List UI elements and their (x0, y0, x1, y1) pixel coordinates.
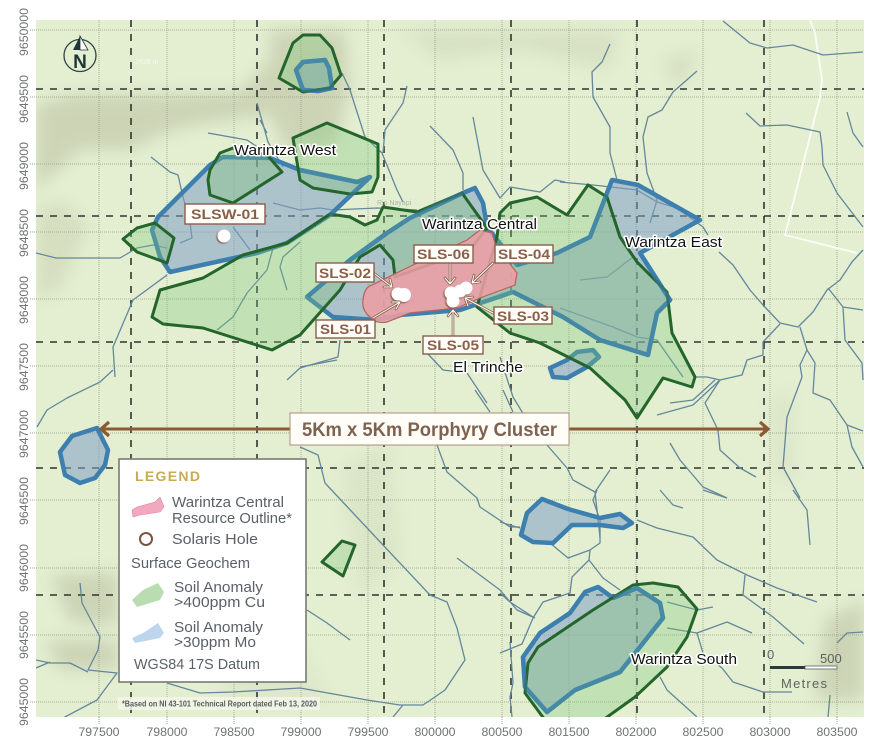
place labels: Warintza Central (422, 217, 537, 233)
leader SLS-02 (375, 274, 392, 287)
hole SLS-05 (446, 294, 460, 308)
northing axis labels: 9647500 (17, 343, 31, 391)
easting axis labels: 803000 (749, 725, 791, 739)
northing axis labels: 9645000 (17, 678, 31, 726)
anomaly: Warintza South Mo (523, 587, 663, 712)
hole SLS-04 (460, 282, 472, 294)
leader SLS-05 (448, 310, 458, 336)
anomaly: Warintza East Cu (477, 185, 695, 418)
legend: molybdenum anomaly: Soil Anomaly (174, 619, 264, 636)
leader arrows (373, 263, 493, 336)
label SLS-05: SLS-05 (427, 337, 479, 353)
northing axis labels: 9649000 (17, 142, 31, 190)
easting axis labels: 799500 (347, 725, 389, 739)
northing axis labels (17, 8, 31, 726)
place labels: Warintza East (625, 235, 722, 251)
legend: molybdenum anomaly (132, 619, 264, 651)
anomaly: big west-central Cu (152, 193, 487, 350)
northing axis labels: 9645500 (17, 611, 31, 659)
hole labels (185, 204, 553, 354)
cluster span arrow (101, 422, 768, 436)
anomaly: Warintza West Cu (208, 148, 282, 203)
anomaly: Warintza West Cu left (123, 223, 174, 263)
leader SLS-01 (373, 302, 400, 318)
scale bar: 500 (820, 651, 842, 666)
legend (119, 459, 306, 682)
scale bar: Metres (781, 676, 828, 691)
label SLS-03: SLS-03 (497, 308, 549, 324)
anomaly: north Mo (296, 60, 332, 91)
legend: Solaris hole (140, 531, 258, 548)
anomaly: north Cu (279, 35, 341, 92)
easting axis labels: 797500 (78, 725, 120, 739)
leader SLS-06 (445, 263, 455, 284)
Warintza Central resource outline (363, 230, 517, 323)
anomaly: small Cu (322, 541, 355, 576)
easting axis labels (78, 725, 858, 739)
legend: resource outline: Warintza Central (172, 494, 284, 511)
label SLSW-01 (185, 204, 265, 224)
molybdenum soil anomalies (60, 60, 700, 712)
label SLSW-01: SLSW-01 (191, 206, 259, 222)
legend: resource outline: Resource Outline* (172, 510, 292, 527)
blue outlines over copper (296, 60, 670, 712)
easting axis labels: 801500 (548, 725, 590, 739)
copper soil anomalies (123, 35, 697, 720)
north arrow (64, 36, 96, 73)
footnote: *Based on NI 43-101 Technical Report dated Feb 13, 2020 (122, 700, 317, 708)
anomaly: Warintza South Cu (525, 583, 697, 720)
cluster banner (290, 413, 569, 445)
place labels (234, 143, 737, 668)
label SLS-01: SLS-01 (320, 321, 371, 337)
legend: copper anomaly (132, 579, 265, 611)
easting axis labels: 798500 (213, 725, 255, 739)
northing axis labels: 9649500 (17, 75, 31, 123)
anomaly: upper Cu (293, 123, 378, 194)
easting axis labels: 802000 (615, 725, 657, 739)
label SLS-04: SLS-04 (498, 246, 550, 262)
easting axis labels: 800000 (414, 725, 456, 739)
hole SLS-03 (454, 284, 466, 298)
legend: copper anomaly: Soil Anomaly (174, 579, 264, 596)
legend: copper anomaly: >400ppm Cu (174, 594, 265, 611)
place labels: El Trinche (453, 360, 523, 376)
faint map annotations: 2426 m (135, 59, 159, 66)
cluster banner: 5Km x 5Km Porphyry Cluster (302, 420, 558, 441)
hole SLSW-01 (218, 230, 230, 242)
scale bar (767, 647, 842, 691)
label SLS-02: SLS-02 (319, 265, 371, 281)
legend: datum: WGS84 17S Datum (134, 656, 260, 673)
easting axis labels: 800500 (481, 725, 523, 739)
anomaly: Warintza West Mo (152, 157, 370, 272)
easting axis labels: 799000 (280, 725, 322, 739)
hole SLS-02 (392, 288, 404, 300)
faint map annotations: Rio Nayapi (377, 200, 412, 207)
faint map annotations (135, 59, 412, 207)
easting axis labels: 798000 (146, 725, 188, 739)
legend: resource outline (132, 494, 292, 527)
place labels: Warintza South (631, 652, 737, 668)
legend: surface geochem: Surface Geochem (131, 555, 250, 572)
scale bar: 0 (767, 647, 774, 662)
footnote (118, 697, 320, 710)
northing axis labels: 9648500 (17, 209, 31, 257)
north arrow: N (73, 52, 87, 73)
leader SLS-04 (472, 263, 493, 283)
anomaly: small Mo by El Trinche (550, 350, 599, 378)
place labels: Warintza West (234, 143, 336, 159)
road (785, 20, 857, 253)
anomaly: far west Mo (60, 428, 108, 483)
legend: Solaris hole: Solaris Hole (172, 531, 258, 548)
northing axis labels: 9646500 (17, 477, 31, 525)
northing axis labels: 9648000 (17, 276, 31, 324)
northing axis labels: 9646000 (17, 544, 31, 592)
leader SLS-03 (465, 297, 493, 313)
label SLS-06: SLS-06 (417, 246, 470, 262)
drill holes (218, 230, 472, 308)
hole SLS-01 (397, 288, 411, 302)
hole SLS-06 (444, 286, 458, 300)
anomaly: south central Mo (521, 499, 632, 543)
anomaly: Warintza Central and East Mo (307, 180, 700, 355)
label SLS-02 (316, 263, 374, 282)
legend: molybdenum anomaly: >30ppm Mo (174, 634, 256, 651)
northing axis labels: 9647000 (17, 410, 31, 458)
northing axis labels: 9650000 (17, 8, 31, 56)
easting axis labels: 802500 (682, 725, 724, 739)
legend title: LEGEND (135, 468, 200, 484)
easting axis labels: 803500 (816, 725, 858, 739)
